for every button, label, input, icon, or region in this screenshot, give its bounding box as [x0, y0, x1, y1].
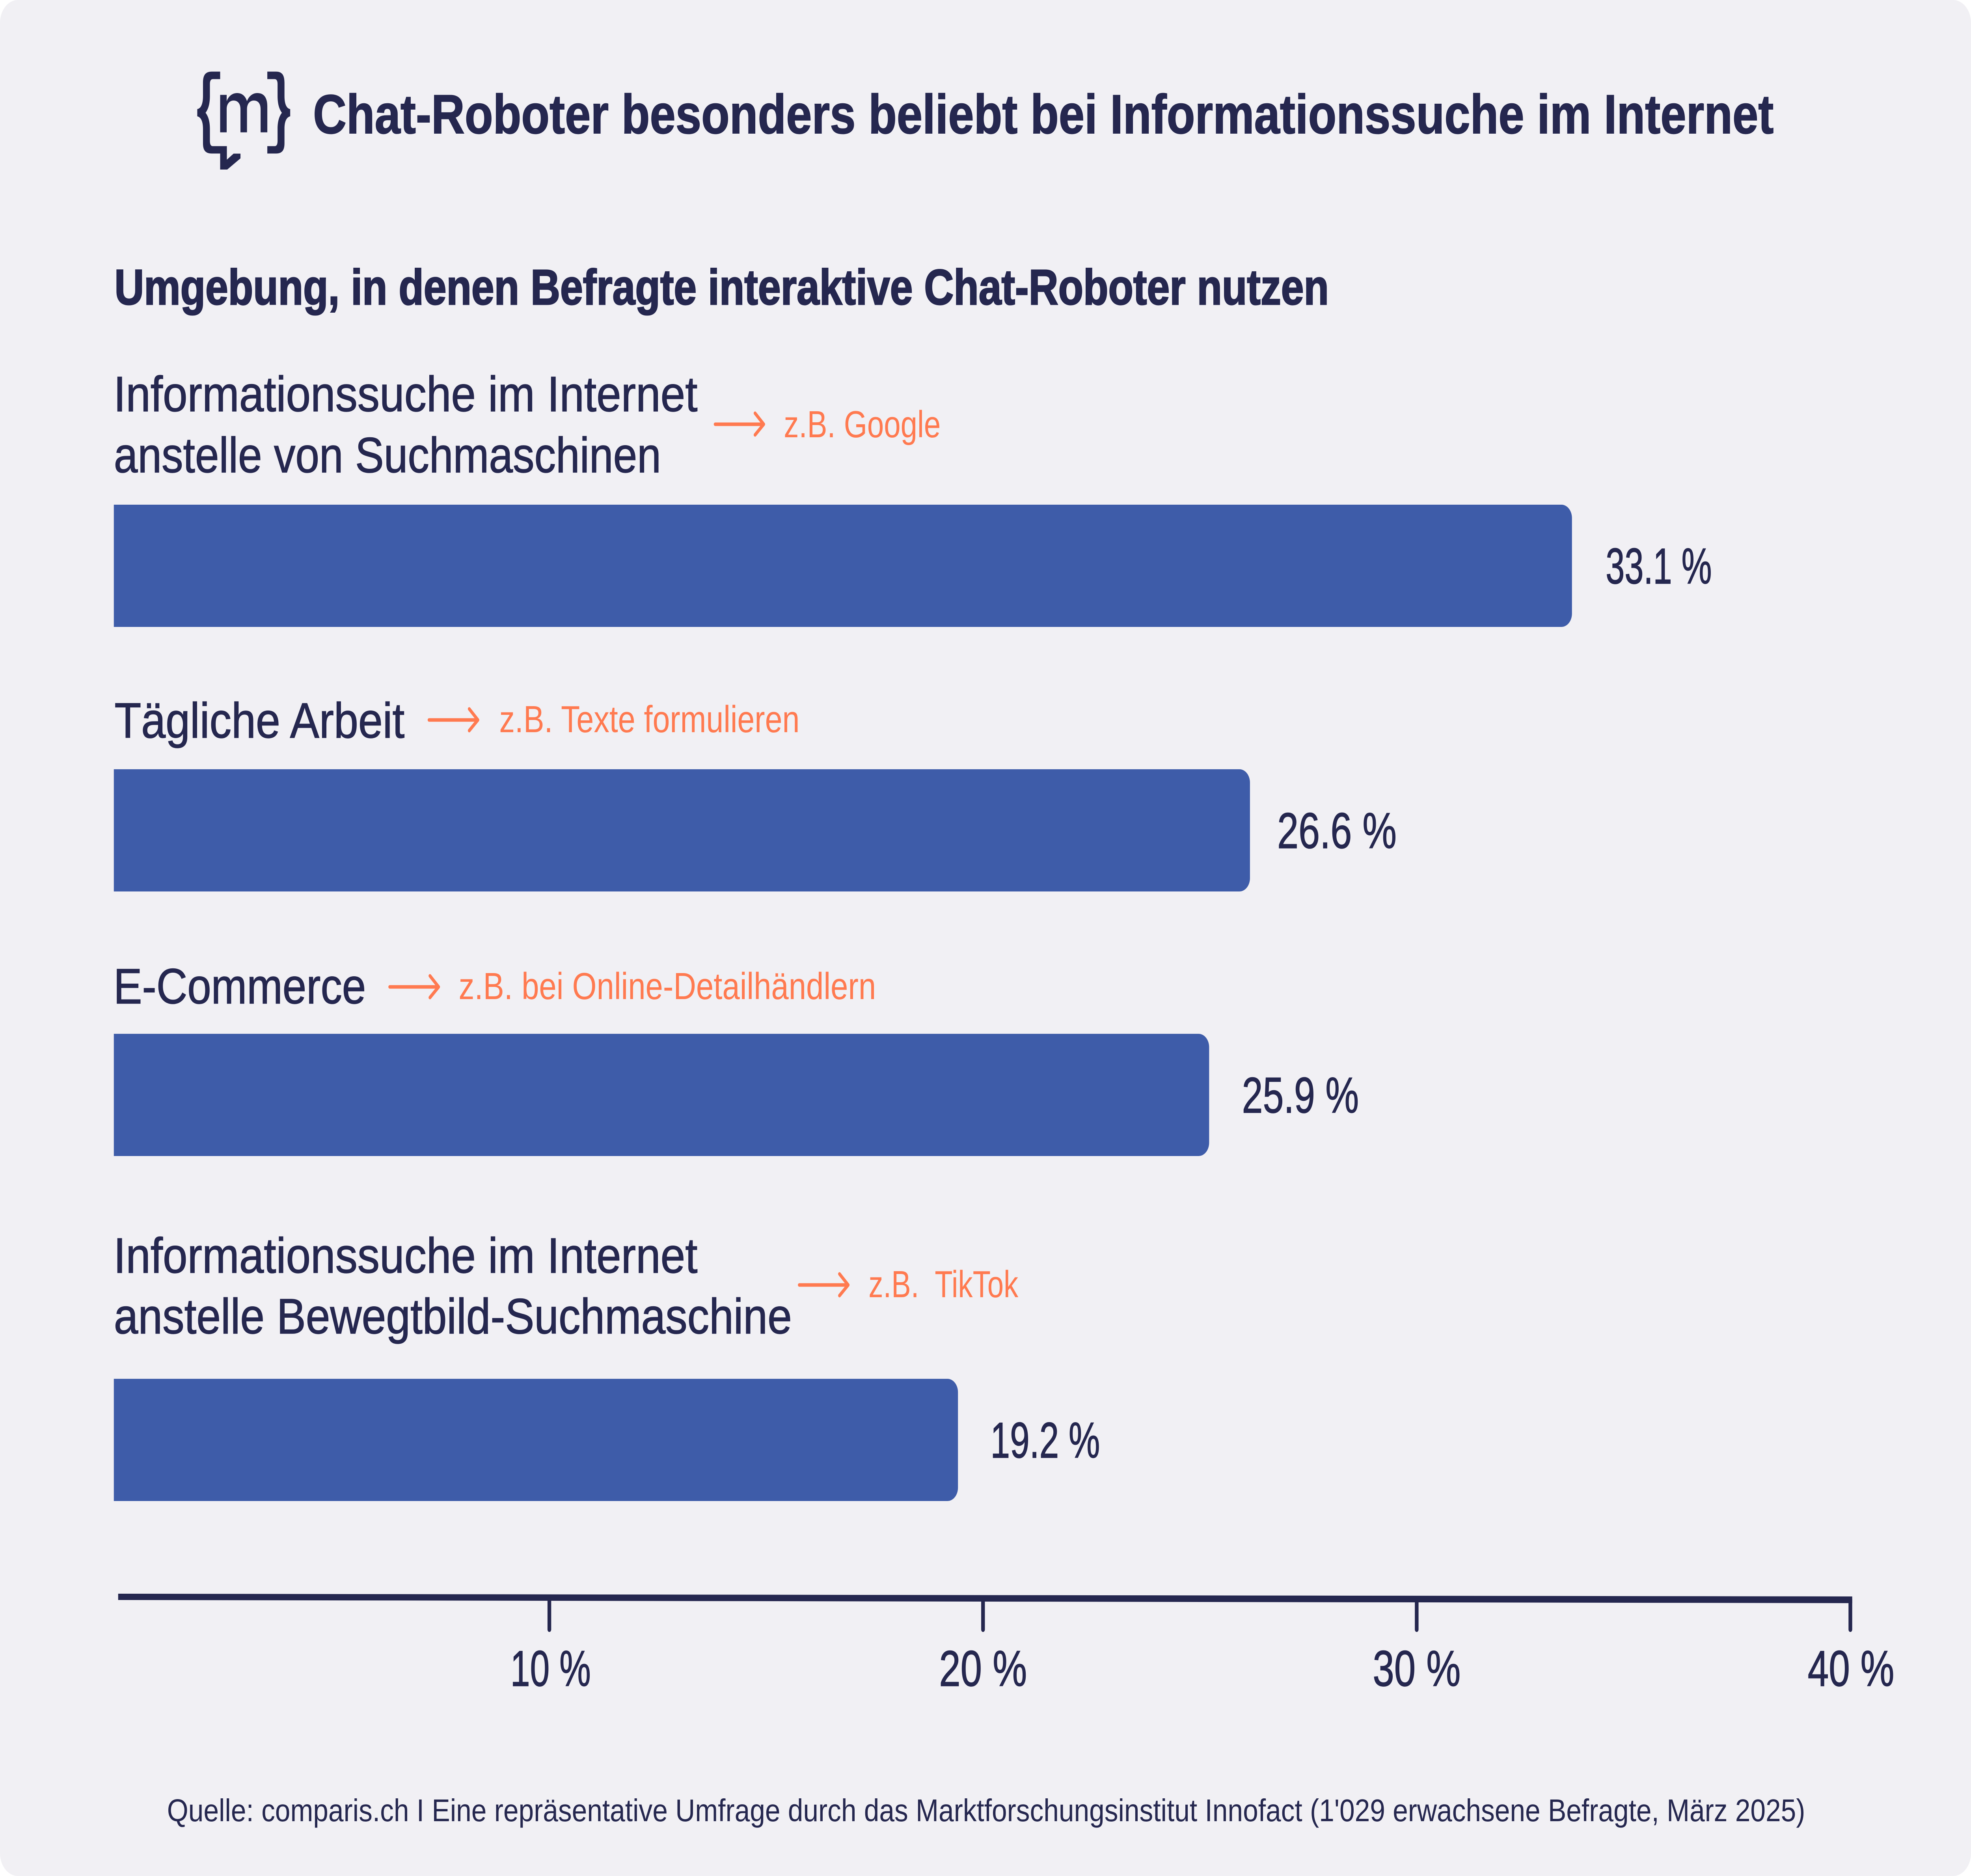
row 3 label: E-Commerce — [114, 958, 366, 1014]
axis tick labels — [510, 1641, 1894, 1697]
title: Chat-Roboter besonders beliebt bei Informationssuche im Internet — [313, 83, 1774, 145]
row 2 example: z.B. Texte formulieren — [499, 698, 799, 740]
row 4 arrow — [799, 1274, 848, 1296]
row 1: Informationssuche anstelle von Suchmaschinen — [114, 366, 1712, 627]
row 4 label: anstelle Bewegtbild-Suchmaschine — [114, 1288, 792, 1344]
row 2 value: 26.6 % — [1277, 803, 1397, 859]
row 1 arrow — [715, 413, 764, 435]
subtitle heading: Umgebung, in denen Befragte interaktive Chat-Roboter nutzen — [114, 259, 1329, 315]
row 1 label: anstelle von Suchmaschinen — [114, 427, 661, 483]
row 4 label: Informationssuche im Internet — [114, 1227, 697, 1283]
axis line — [118, 1594, 1852, 1603]
axis ticks — [550, 1597, 1850, 1630]
row 2: Tägliche Arbeit — [114, 692, 1397, 891]
row 1 example: z.B. Google — [784, 403, 941, 446]
axis tick labels: 20 % — [939, 1641, 1027, 1697]
x axis — [118, 1594, 1894, 1697]
axis tick labels: 40 % — [1808, 1641, 1894, 1697]
axis tick labels: 30 % — [1373, 1641, 1461, 1697]
row 3 example: z.B. bei Online-Detailhändlern — [459, 965, 876, 1007]
row 4: Informationssuche anstelle Bewegtbild-Suchmaschine — [114, 1227, 1100, 1501]
source note: Quelle: comparis.ch I Eine repräsentative Umfrage durch das Marktforschungsinstitut Innofact (1'029 erwachsene Befragte, März 2025) — [167, 1793, 1805, 1828]
row 1 bar — [114, 505, 1572, 627]
row 3 value: 25.9 % — [1242, 1067, 1359, 1124]
row 4 value: 19.2 % — [991, 1412, 1100, 1469]
row 1 label — [114, 366, 697, 483]
row 2 arrow — [429, 709, 478, 731]
row 3 arrow — [390, 976, 439, 998]
axis tick labels: 10 % — [510, 1641, 591, 1697]
row 1 label: Informationssuche im Internet — [114, 366, 697, 422]
row 2 bar — [114, 769, 1250, 891]
row 2 label: Tägliche Arbeit — [114, 692, 404, 748]
row 3: E-Commerce — [114, 958, 1359, 1156]
row 1 value: 33.1 % — [1606, 538, 1712, 595]
row 4 label — [114, 1227, 792, 1344]
icon: logo {m} speech bubble — [197, 72, 290, 170]
row 4 bar — [114, 1379, 958, 1501]
row 4 example: z.B. TikTok — [868, 1263, 1019, 1305]
row 3 bar — [114, 1034, 1209, 1156]
